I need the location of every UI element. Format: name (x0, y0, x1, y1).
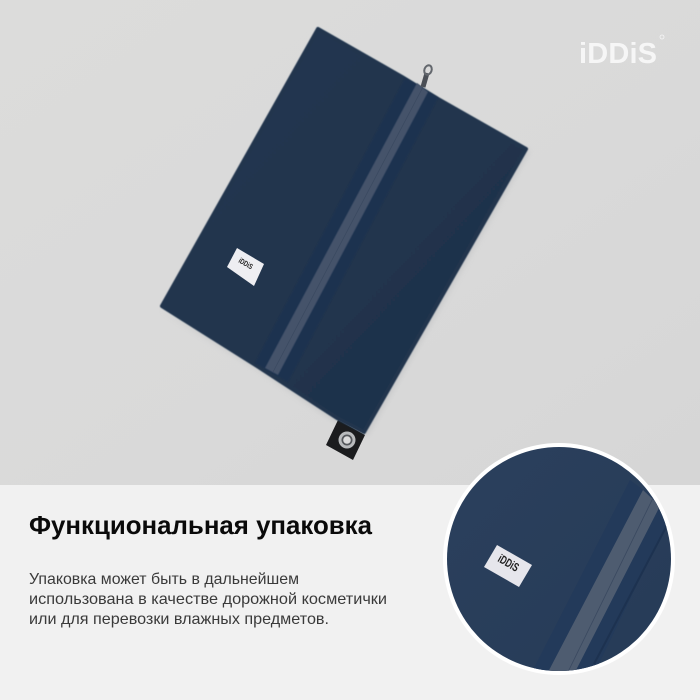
circle fabric (447, 447, 671, 671)
registered mark (660, 35, 664, 39)
body text: Упаковка может быть в дальнейшем (29, 571, 299, 588)
zoom circle callout (440, 440, 680, 680)
body text (29, 571, 387, 628)
zipper tape (265, 83, 428, 375)
circle zipper tape (546, 490, 660, 676)
title: Функциональная упаковка (29, 510, 373, 540)
logo: iDDiS (579, 38, 657, 70)
circle label (484, 545, 532, 587)
caption panel background (0, 485, 700, 700)
circle band stitching (594, 525, 667, 664)
circle label: iDDiS (496, 551, 522, 575)
circle zipper band (534, 497, 666, 671)
photo background (0, 0, 700, 485)
body text: использована в качестве дорожной косметички (29, 591, 387, 608)
pouch body (162, 29, 526, 432)
sewn label: iDDiS (237, 256, 254, 271)
body text: или для перевозки влажных предметов. (29, 611, 329, 628)
sewn label (227, 248, 264, 286)
pouch shadow (160, 150, 530, 436)
zipper band (255, 78, 438, 382)
grommet tab (326, 420, 365, 460)
zipper pull (423, 64, 433, 87)
product: navy pouch (160, 29, 530, 460)
grommet ring (338, 432, 356, 448)
